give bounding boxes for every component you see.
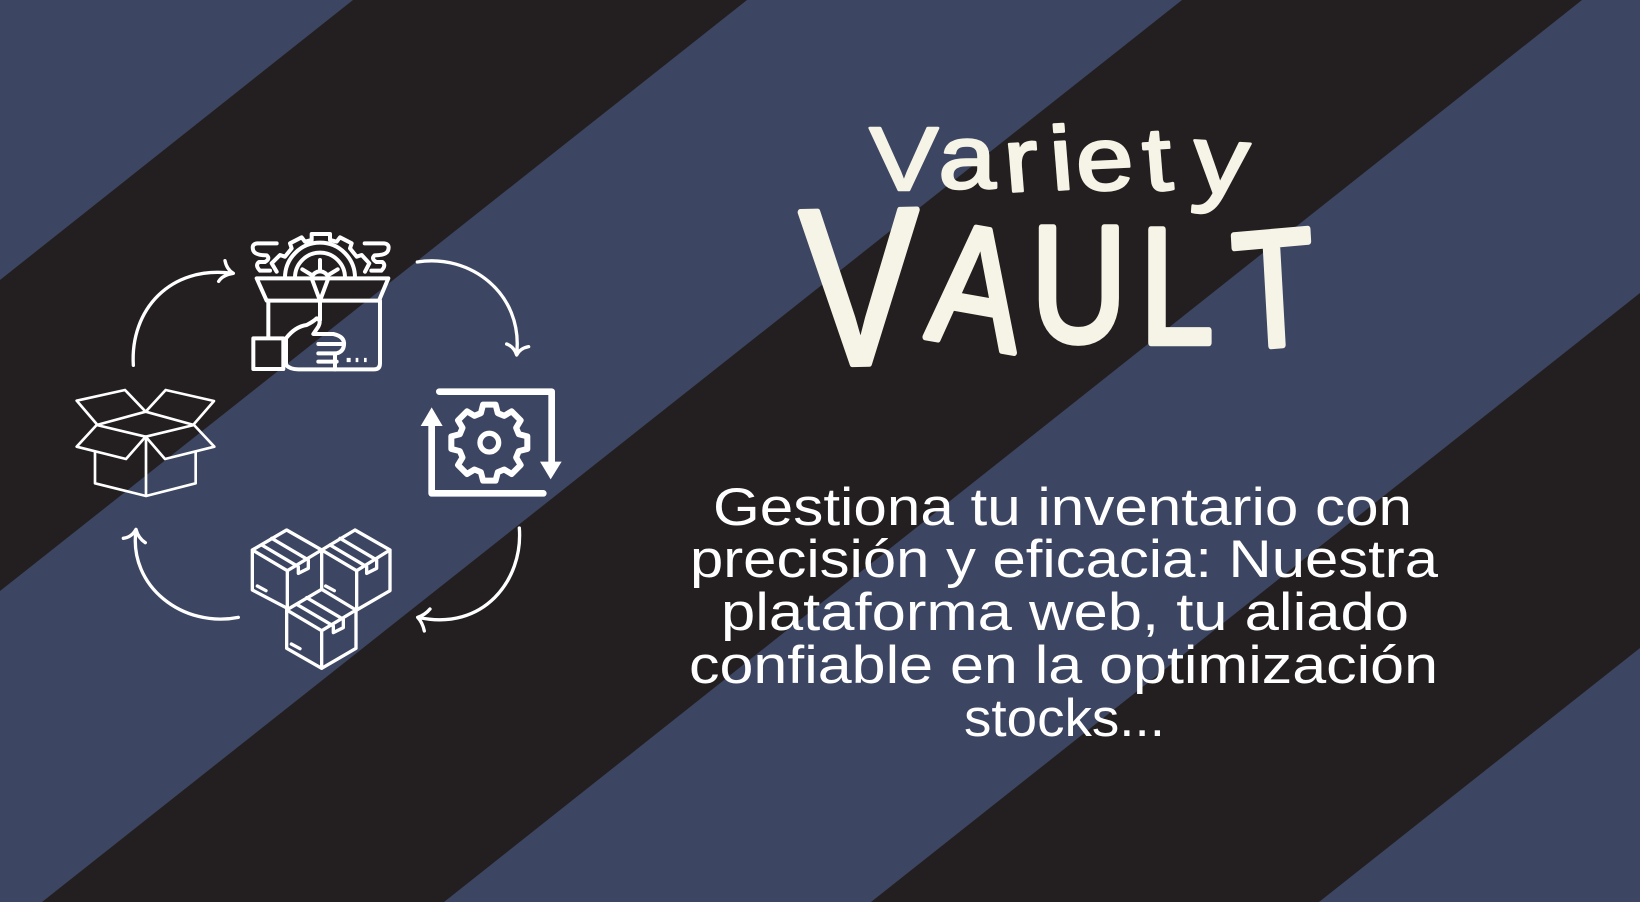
tagline text block: plataforma web, tu aliado	[721, 583, 1409, 642]
tagline text block: Gestiona tu inventario con	[713, 478, 1412, 537]
tagline text block: precisión y eficacia: Nuestra	[690, 530, 1439, 589]
title line: VAULT: VAULT	[799, 161, 1319, 412]
icon: box with gear and thumbs-up hand	[253, 234, 389, 369]
title	[799, 104, 1319, 412]
process cycle diagram	[77, 234, 562, 668]
icon: stacked cardboard boxes	[252, 530, 390, 668]
icon: open box	[77, 390, 214, 496]
icon: gear with rotating process arrows	[421, 392, 562, 493]
tagline text block: stocks...	[964, 689, 1165, 748]
arrow: bottom right	[418, 528, 520, 631]
arrow: top right	[417, 261, 529, 355]
tagline text block: confiable en la optimización	[689, 636, 1438, 695]
title line: Variety: Variety	[869, 104, 1254, 217]
tagline text block	[689, 478, 1439, 748]
arrow: bottom left	[123, 529, 238, 619]
arrow: top left	[133, 261, 233, 365]
